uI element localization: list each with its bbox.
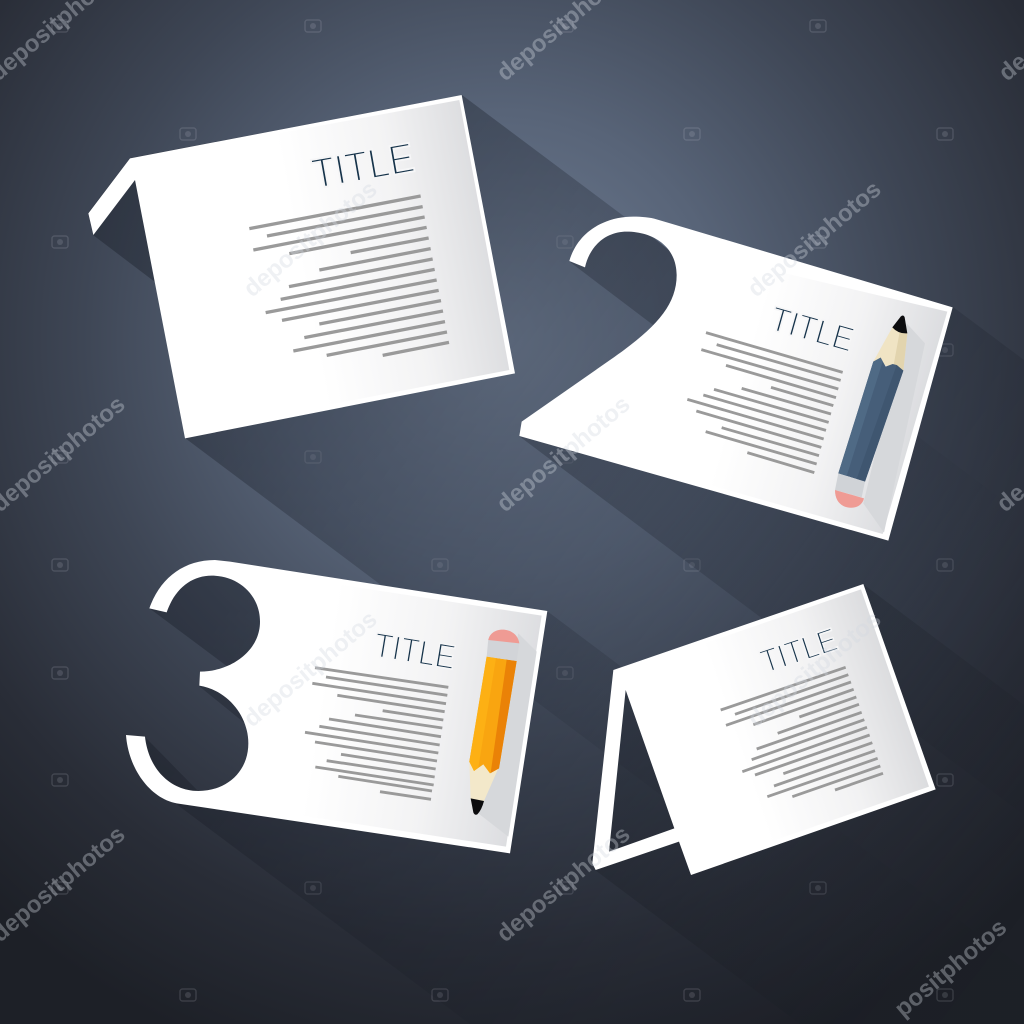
paper shape of numeral 4 <box>592 584 936 875</box>
long shadow: card 3 <box>126 560 1024 1024</box>
paper shape of numeral 1 <box>88 95 515 438</box>
watermark text: depositphotos <box>743 606 887 733</box>
inner shaded page <box>617 589 929 868</box>
icon: blue pencil <box>835 315 925 533</box>
body text lines <box>687 333 843 473</box>
title: TITLE <box>756 620 842 680</box>
panel: step 1 card <box>88 95 515 438</box>
watermark text: depositphotos <box>743 176 887 303</box>
watermark text: depositphotos <box>239 176 383 303</box>
title: TITLE <box>371 626 458 677</box>
inner shaded page <box>143 100 509 432</box>
long shadow: card 4 <box>595 584 1024 1024</box>
watermark text: positphotos <box>890 914 1012 1023</box>
title: TITLE <box>308 133 418 198</box>
paper shape of numeral 3 <box>126 560 547 853</box>
panel: step 3 card <box>126 560 547 853</box>
inner shaded page <box>643 263 947 534</box>
body text lines <box>249 196 449 355</box>
body text lines <box>721 667 883 797</box>
watermark text: depositphotos <box>492 391 636 518</box>
paper shape of numeral 2 <box>519 217 953 541</box>
long shadow: card 2 <box>519 217 1024 815</box>
watermark text: depositphotos <box>239 606 383 733</box>
icon: orange pencil <box>469 630 537 837</box>
watermark text: depositphotos <box>492 821 636 948</box>
panel: step 4 card <box>592 584 936 875</box>
inner shaded page <box>287 582 542 847</box>
body text lines <box>305 668 448 799</box>
title: TITLE <box>766 300 858 360</box>
panel: step 2 card <box>519 217 953 541</box>
